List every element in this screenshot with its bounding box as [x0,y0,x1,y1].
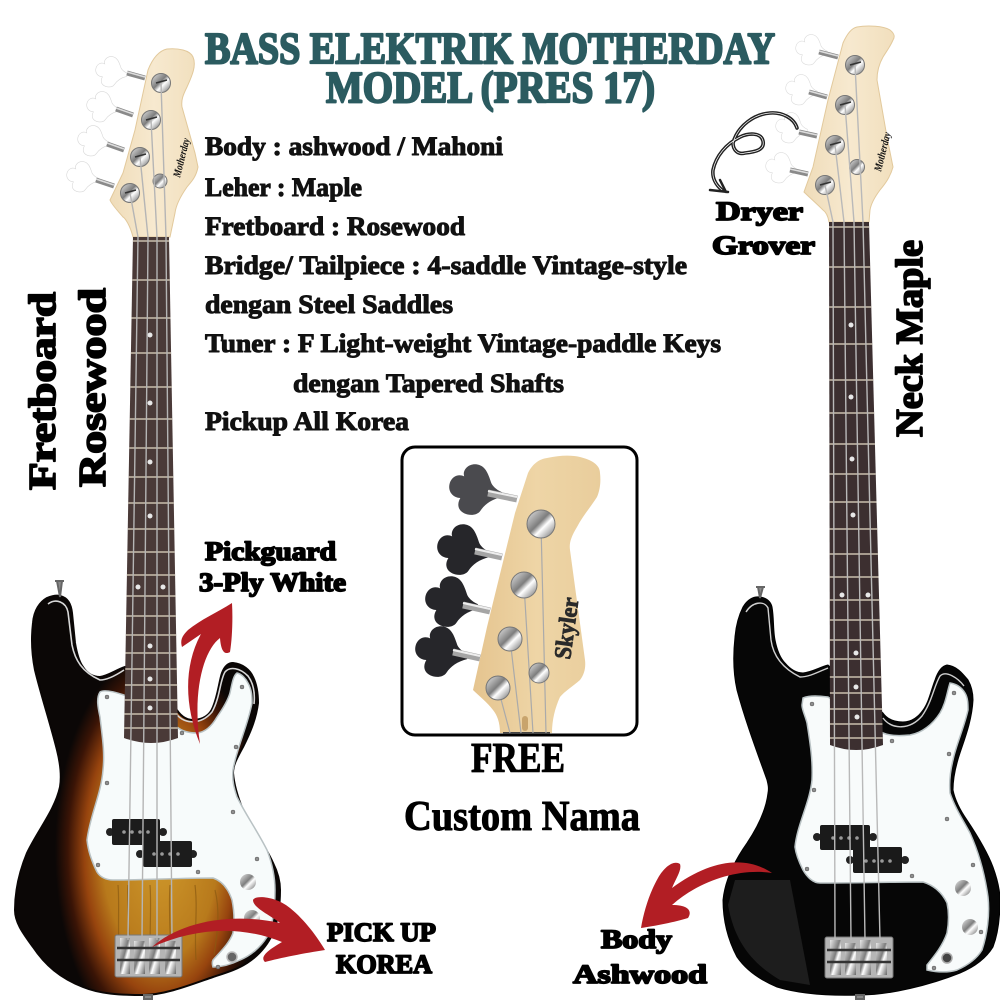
panel strings [498,524,546,733]
label: dryer grover: Dryer [716,197,803,226]
right knobs and jack [942,880,978,963]
label: pick up korea: KOREA [336,950,432,979]
callout: free custom nama: Custom Nama [404,794,640,840]
right neck [829,222,883,750]
left strings [128,83,172,940]
right guitar: black bass [723,26,1000,999]
right tuner posts [816,56,864,194]
right bridge [825,937,893,978]
label: dryer grover [712,197,815,260]
vertical label: neck maple: Neck Maple [889,240,931,437]
right pickups [813,825,909,873]
right post slots [820,62,861,185]
title: BASS ELEKTRIK MOTHERDAY [205,24,775,73]
right headstock [804,26,894,222]
right strap buttons [756,587,864,999]
panel tuner keys [411,460,517,682]
text block: specifications: Tuner : F Light-weight Vintage-paddle Keys [205,329,721,358]
right logo: Motherday [872,131,894,174]
text block: specifications: Leher : Maple [205,173,362,202]
label: body ashwood: Ashwood [573,960,708,989]
left tuner posts [120,74,170,202]
callout: free custom nama: FREE [471,736,565,782]
text block: specifications: Body : ashwood / Mahoni [205,132,503,161]
left body edge highlight [48,601,254,722]
arrow: pick up [152,897,325,962]
left headstock [110,49,198,237]
text block: specifications: dengan Steel Saddles [205,290,453,319]
label: dryer grover: Grover [712,231,815,260]
left bridge [115,935,182,977]
label: body ashwood: Body [601,925,672,954]
vertical label: fretboard rosewood: Rosewood [72,288,114,487]
right body edge highlight [746,603,964,727]
left tuner pegs [64,54,145,195]
left pickguard screws [96,685,259,969]
vertical label: fretboard rosewood: Fretboard [22,292,64,490]
arrow: pickguard [181,603,232,744]
left guitar: sunburst bass [15,49,280,999]
right tuner pegs [763,32,838,186]
panel truss slot [522,716,528,731]
title [205,24,775,112]
vertical label: fretboard rosewood [22,288,114,490]
panel headstock [473,456,600,733]
left logo: Motherday [171,137,193,180]
text block: specifications: Fretboard : Rosewood [205,212,466,241]
panel logo: Skyler [550,596,585,661]
left strap buttons [55,581,152,999]
left body grain [118,885,218,978]
label: pickguard: 3-Ply White [199,568,346,597]
label: pick up korea: PICK UP [327,918,436,947]
text block: specifications [205,132,721,436]
left pickguard [87,673,275,967]
label: body ashwood [573,925,708,989]
panel: free custom name headstock [402,447,637,735]
panel tuner posts [486,510,555,700]
text block: specifications: dengan Tapered Shafts [293,369,564,398]
text block: specifications: Bridge/ Tailpiece : 4-saddle Vintage-style [205,251,687,280]
left post slots [125,80,167,193]
left body [15,596,280,995]
right strings [825,65,880,940]
left neck [124,237,178,743]
panel fretboard edge [503,732,550,734]
arrow: body [641,862,772,928]
title: MODEL (PRES 17) [326,63,655,112]
left knobs and jack [227,874,260,962]
callout: free custom nama [404,736,640,840]
left pickups [106,819,197,867]
right body reflection [728,880,810,985]
panel border [402,447,637,735]
label: pickguard: Pickguard [205,537,337,566]
text block: specifications: Pickup All Korea [205,407,409,436]
label: pick up korea [327,918,436,979]
right pickguard screws [805,691,983,970]
label: pickguard [199,537,346,597]
right body [723,597,1000,995]
arrow: dryer grover [710,113,797,192]
right pickguard [795,683,989,972]
